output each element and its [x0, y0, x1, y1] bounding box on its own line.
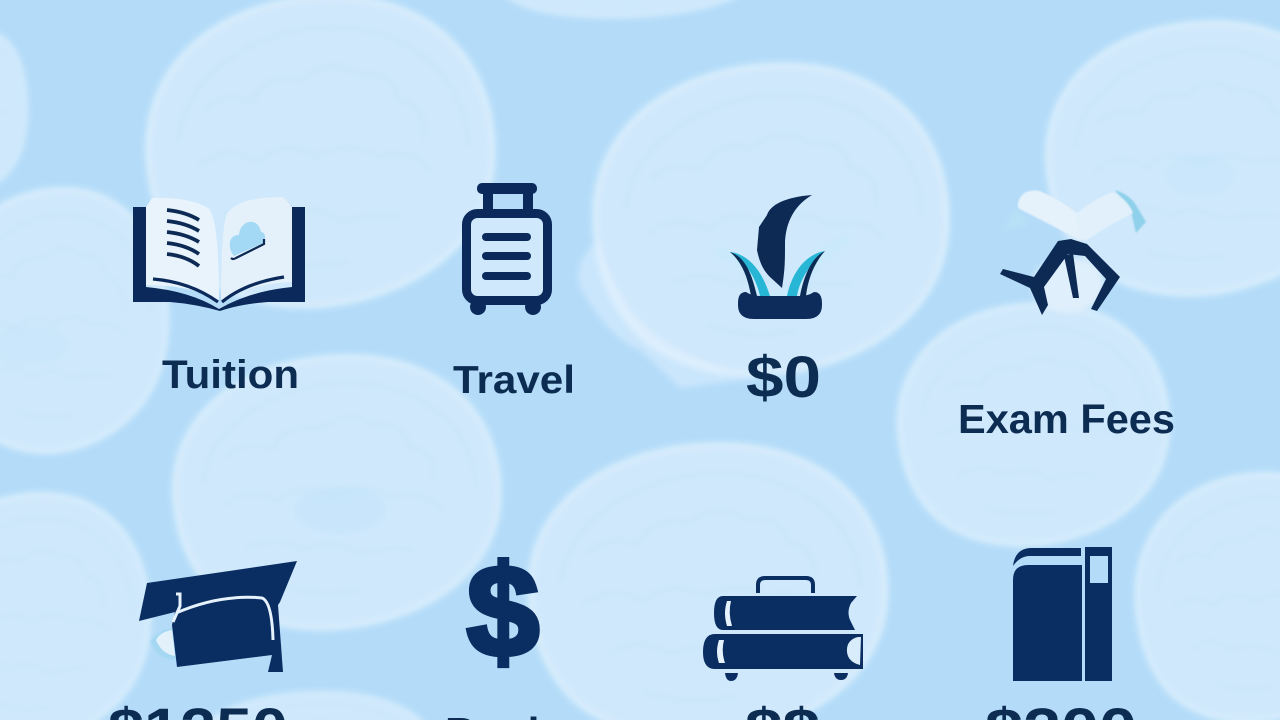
item: travel: [453, 183, 575, 402]
icon: graduation cap: [139, 561, 297, 672]
label: Tuition: Tuition: [162, 353, 299, 397]
item: books: [445, 538, 575, 720]
item: $200: [985, 547, 1137, 720]
icon: stacked books with handle: [703, 578, 863, 681]
item: $1250: [108, 561, 297, 720]
item: $$: [703, 578, 863, 720]
item: zero cost: [716, 195, 848, 410]
icon: open book on stand: [1000, 190, 1146, 315]
item: tuition: [133, 197, 305, 397]
label: Exam Fees: Exam Fees: [958, 396, 1175, 442]
item: exam fees: [958, 190, 1175, 442]
icon: dollar sign: $: [467, 538, 539, 684]
icon: open book: [133, 197, 305, 311]
icon: standing book: [1013, 547, 1112, 681]
label: Travel: Travel: [453, 359, 575, 402]
icon: suitcase: [466, 183, 548, 315]
label: $0: $0: [746, 345, 821, 410]
icon: quill and grass: [716, 195, 848, 319]
